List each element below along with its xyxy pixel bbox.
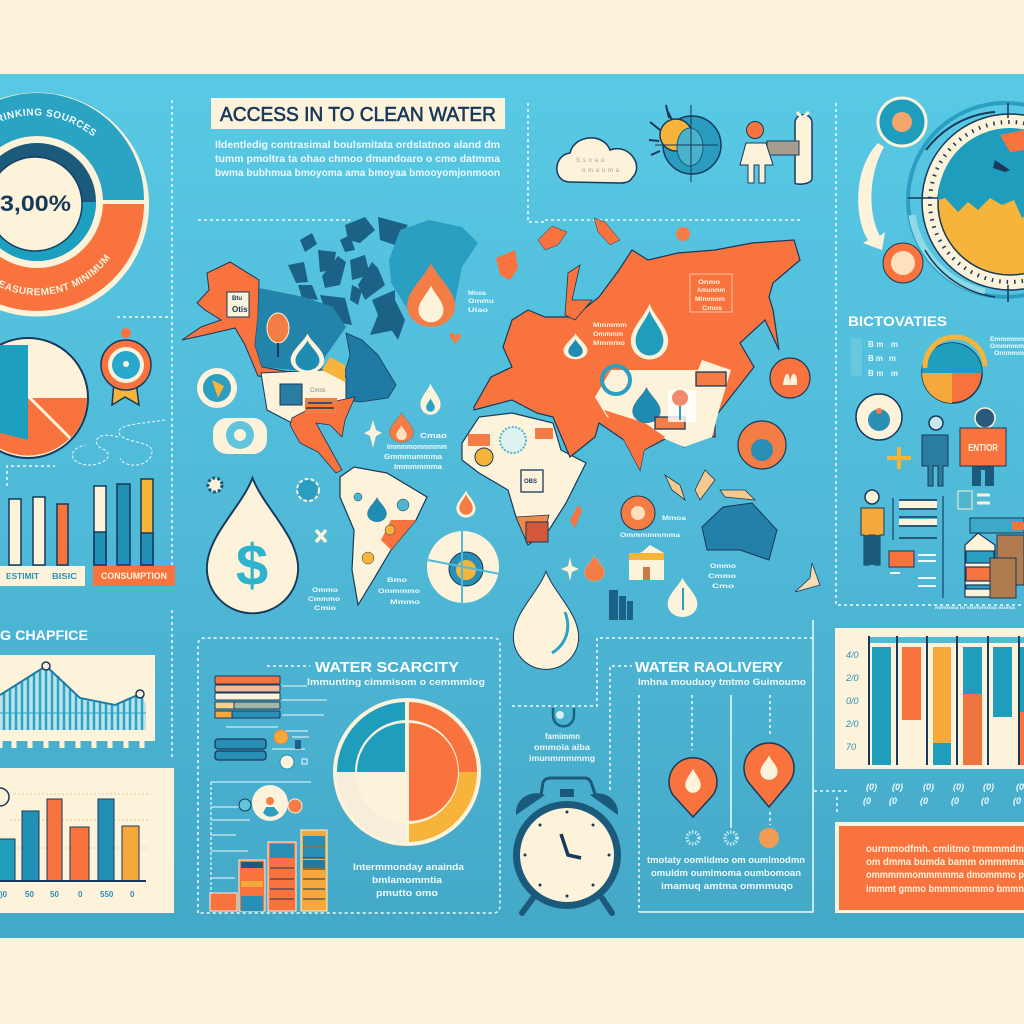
icon: sparkle lower [561, 557, 579, 581]
map text: south america left: Ommo [312, 588, 338, 594]
map: southeast asia islands [665, 470, 755, 500]
icon: person with sign [960, 408, 1006, 486]
drop: atlantic [420, 383, 441, 415]
drop: asia teal [633, 388, 660, 423]
drop: atlantic orange [390, 412, 414, 442]
legend list: Bm m [868, 369, 898, 378]
map icon: africa globe [500, 427, 526, 453]
map callout: usa screen [280, 384, 326, 405]
caption clock: imunmmmmmg [529, 754, 595, 763]
map: india [604, 410, 665, 470]
icon: small card [958, 491, 990, 509]
map text: russia left: Ommmm [593, 332, 623, 338]
drop: greenland orange [407, 263, 455, 327]
bar chart lower left [0, 768, 174, 913]
panel: line chart heading: G CHAPFICE [0, 627, 88, 643]
icon: boxes [990, 535, 1024, 598]
pin right [744, 743, 794, 807]
legend list: Bm m [868, 340, 898, 349]
icon: cross [316, 530, 326, 542]
map icon: asia orange lines [655, 372, 726, 429]
icon: community badge [856, 394, 902, 440]
panel: right column chart: 0/0 [846, 696, 859, 706]
map callout: africa screen [521, 470, 543, 492]
map text: pacific right: Cmmo [708, 574, 736, 580]
stacked bars [210, 830, 327, 911]
big drop: dollar: $ [236, 533, 268, 598]
drop: north america teal [291, 334, 324, 373]
map text: mid atlantic: Immmmommmmm [387, 444, 447, 451]
column chart axis labels: (0 [920, 796, 928, 806]
map: africa [462, 413, 586, 545]
map callout: usa orange text [305, 398, 337, 414]
map text: russia box [690, 274, 732, 312]
column chart axis labels: (0 [981, 796, 989, 806]
map callout: africa screen: OBS [524, 479, 537, 485]
map: iceland [496, 250, 518, 280]
map text: russia box: Mimmom [695, 297, 725, 303]
icon: person blue [922, 416, 948, 486]
icon: alarm clock [513, 778, 621, 913]
caption scarcity: bmlamommtia [372, 875, 443, 886]
network badge [239, 785, 302, 821]
map text: russia left: Mmmmo [593, 341, 625, 347]
icon: house [629, 545, 664, 580]
donut chart scarcity [333, 698, 481, 846]
map: africa south tip [516, 515, 549, 545]
icon: person with sign: ENTIOR [968, 443, 999, 454]
panel: world map [182, 217, 820, 620]
drop: south atlantic [456, 490, 476, 518]
legend right: CONSUMPTION [101, 571, 167, 581]
map: asia cream region [595, 360, 731, 447]
column chart axis labels: (0) [923, 782, 934, 792]
icon: bottle [965, 533, 995, 597]
bracket lines [211, 782, 311, 878]
map text: mid atlantic [384, 433, 447, 471]
map: new zealand [795, 563, 820, 592]
line chart [0, 655, 155, 748]
small orange panel with lines [889, 551, 936, 586]
intro text [215, 139, 500, 179]
arrow: curved [858, 143, 885, 250]
pie chart [0, 338, 88, 458]
map text: pacific right: Cmo [712, 584, 735, 590]
map text: atlantic label [468, 291, 494, 314]
column chart axis labels: (0) [983, 782, 994, 792]
map text: indian ocean: Mmoa [662, 516, 687, 522]
panel: right column chart: 4/0 [846, 650, 859, 660]
caption recovery: omuldm oumlmoma oumbomoan [651, 868, 801, 879]
map: usa [261, 370, 346, 423]
map callout: alaska label: Btu [232, 296, 242, 302]
icon: sparkle [364, 420, 382, 448]
map text: south america right: Mmmo [390, 600, 421, 606]
panel: right column chart: 70 [846, 742, 856, 752]
map text: indian ocean [620, 516, 687, 539]
bar chart lower left: 50 [25, 890, 34, 899]
small circles [272, 730, 309, 769]
panel: right globe gauge [908, 103, 1024, 302]
map text: russia left: Mmmmm [593, 323, 627, 329]
column chart axis labels: (0 [863, 796, 871, 806]
donut value: 3,00% [0, 191, 71, 216]
map text: russia box: Cmos [702, 306, 723, 312]
icon: storage skyline [970, 518, 1024, 533]
big drop: cream [513, 571, 579, 669]
bar chart lower left: 550 [100, 890, 114, 899]
icon: person at tap [740, 112, 812, 184]
map text: russia left [593, 323, 627, 347]
intro text: tumm pmoltra ta ohao chmoo dmandoaro o cmo datmma [215, 153, 500, 165]
dotted circles [687, 828, 779, 848]
drop: russia large [631, 304, 668, 360]
pie: initiatives [922, 337, 985, 403]
map text: pacific right [708, 564, 736, 590]
map text: russia box: Amunmm [697, 288, 725, 294]
heading: water scarcity: WATER SCARCITY [315, 659, 459, 676]
legend right [93, 566, 175, 586]
bar chart lower left: 50 [50, 890, 59, 899]
icon: south america bubbles [354, 493, 409, 564]
map icon: small globe [297, 479, 319, 501]
map icon: small node [208, 478, 222, 492]
map: central plains yellow [322, 357, 345, 382]
map icon: canada orange balloon [267, 313, 289, 357]
column chart axis labels [863, 782, 1024, 806]
caption clock [529, 732, 595, 763]
icon: cloud: Ssoau [576, 158, 604, 164]
bar group left [9, 497, 68, 565]
dashed squiggle [72, 420, 165, 465]
map icon: asia flower [668, 390, 696, 422]
icon: sun badge [883, 243, 923, 283]
map text: atlantic label: Uiao [468, 308, 488, 314]
caption recovery: tmotaty oomlidmo om oumlmodmn [647, 855, 805, 866]
text: initiatives side: Ommmm [994, 351, 1024, 357]
column chart axis labels: (0 [951, 796, 959, 806]
map text: mid atlantic: Immmmmma [394, 464, 442, 471]
icon: orange bulb [676, 227, 690, 241]
text: initiatives side [990, 337, 1024, 357]
icon: sun and water globe [649, 105, 721, 182]
map icon: pie badge [427, 530, 500, 605]
leader lines [226, 686, 327, 731]
map: canada west [255, 288, 346, 370]
map: greenland [389, 220, 478, 327]
map icon: africa orange details [468, 428, 553, 542]
map: asia swirl [602, 366, 630, 394]
legend list [851, 338, 898, 378]
column chart axis labels: (0) [892, 782, 903, 792]
map: scandinavia [565, 265, 592, 320]
panel: donut stat [0, 92, 149, 316]
map text: mid atlantic: Cmao [420, 433, 447, 440]
icon: heart [449, 333, 461, 344]
map text: south america left: Cmio [314, 606, 336, 612]
callout box [835, 822, 1024, 913]
map text: indian ocean: Ommmmmmma [620, 533, 681, 539]
text: initiatives side: Emmmmm [990, 337, 1024, 343]
panel: right column chart [835, 628, 1024, 769]
map text: south america right: Bmo [387, 578, 407, 584]
map icon: orange right top [770, 358, 810, 398]
small bars [215, 739, 266, 760]
column chart axis labels: (0 [889, 796, 897, 806]
pin left [669, 758, 717, 817]
stack of bars [215, 676, 280, 718]
map text: atlantic label: Mnoa [468, 291, 487, 297]
icon: top ring [878, 98, 926, 146]
bar chart lower left: 0 [78, 890, 83, 899]
map text: mid atlantic: Gmmmummma [384, 454, 442, 461]
drop: pacific cream [668, 578, 697, 617]
map: svalbard [594, 218, 620, 245]
column chart axis labels: (0 [1013, 796, 1021, 806]
legend left: BISIC [52, 572, 77, 581]
caption scarcity: Intermmonday anainda [353, 862, 465, 873]
map: australia [702, 503, 777, 560]
map: south us and mexico [290, 397, 355, 473]
subheading: Immunting cimmisom o cemmmlog [307, 677, 485, 688]
map callout: usa screen: Cmos [310, 388, 326, 394]
icon: buildings [609, 590, 633, 620]
map: eurasia [474, 240, 800, 470]
map text: russia box: Onmo [698, 280, 720, 286]
dashed text row: mmmma m ommmmoa moma [935, 605, 1016, 610]
panel: water scarcity [198, 638, 500, 913]
column chart axis labels: (0) [953, 782, 964, 792]
big drop: dollar [207, 478, 298, 613]
icon: person yellow [861, 490, 884, 565]
intro text: Ildentledig contrasimal boulsmitata ordslatnoo aland dm [215, 139, 500, 151]
list lines [893, 496, 943, 598]
map text: pacific right: Ommo [710, 564, 736, 570]
caption recovery: imamuq amtma ommmuqo [661, 881, 793, 892]
panel: right column chart: 2/0 [845, 719, 859, 729]
panel dividers [7, 100, 1024, 912]
drop: russia small [564, 333, 588, 359]
map: south america [340, 467, 427, 605]
caption clock: ommoia aiba [534, 743, 591, 752]
title [211, 98, 505, 129]
map callout: alaska label: Otis [232, 305, 248, 314]
legend left [0, 566, 85, 586]
map text: south america left [308, 588, 340, 612]
column chart axis labels: (0) [866, 782, 877, 792]
icon: cloud: omauma [582, 168, 620, 174]
map: alaska [182, 262, 290, 378]
legend list: Bm m [868, 354, 896, 363]
subheading recovery: Imhna mouduoy tmtmo Guimoumo [638, 677, 806, 688]
heading: initiatives: BICTOVATIES [848, 314, 947, 329]
intro text: bwma bubhmua bmoyoma ama bmoyaa bmooyomjonmoon [215, 167, 500, 179]
icon: plus [887, 447, 911, 469]
map: madagascar [570, 505, 582, 528]
bar group right [94, 479, 153, 565]
panel: right column chart: 2/0 [845, 673, 859, 683]
column chart axis labels: (0 [1016, 782, 1024, 792]
caption clock: famimmn [545, 732, 580, 741]
map icon: brain badge [213, 418, 267, 454]
map icon: circle left globe [197, 368, 237, 408]
map text: south america right: Ommmmo [378, 589, 420, 595]
bar chart lower left: )0 [0, 890, 8, 899]
icon: cloud [557, 138, 637, 183]
caption scarcity: pmutto omo [376, 888, 438, 899]
caption scarcity [353, 862, 465, 899]
text: initiatives side: Ommmmm [990, 344, 1024, 350]
connector lines [692, 695, 770, 825]
icon: small u drop [553, 708, 574, 726]
bar chart lower left: 0 [130, 890, 135, 899]
heading: water recovery: WATER RAOLIVERY [635, 659, 783, 676]
map: uk islands [538, 226, 567, 250]
map callout: alaska label [227, 292, 249, 317]
map: north america arctic islands [288, 217, 408, 340]
map: canada east [345, 333, 396, 402]
map text: south america left: Cmmmo [308, 597, 340, 603]
drop: south america [367, 497, 387, 522]
panel: water recovery [635, 620, 813, 912]
map: south america orange region [381, 520, 416, 550]
title: ACCESS IN TO CLEAN WATER [220, 104, 496, 126]
caption recovery [647, 855, 805, 892]
icon: medal [101, 328, 151, 405]
legend left: ESTIMIT [6, 572, 39, 581]
drop: indian ocean orange [584, 555, 605, 581]
map icon: orange right mid [738, 421, 786, 469]
map icon: orange ocean [621, 496, 655, 530]
map text: south america right [378, 578, 421, 606]
map text: atlantic label: Ommu [468, 299, 494, 305]
